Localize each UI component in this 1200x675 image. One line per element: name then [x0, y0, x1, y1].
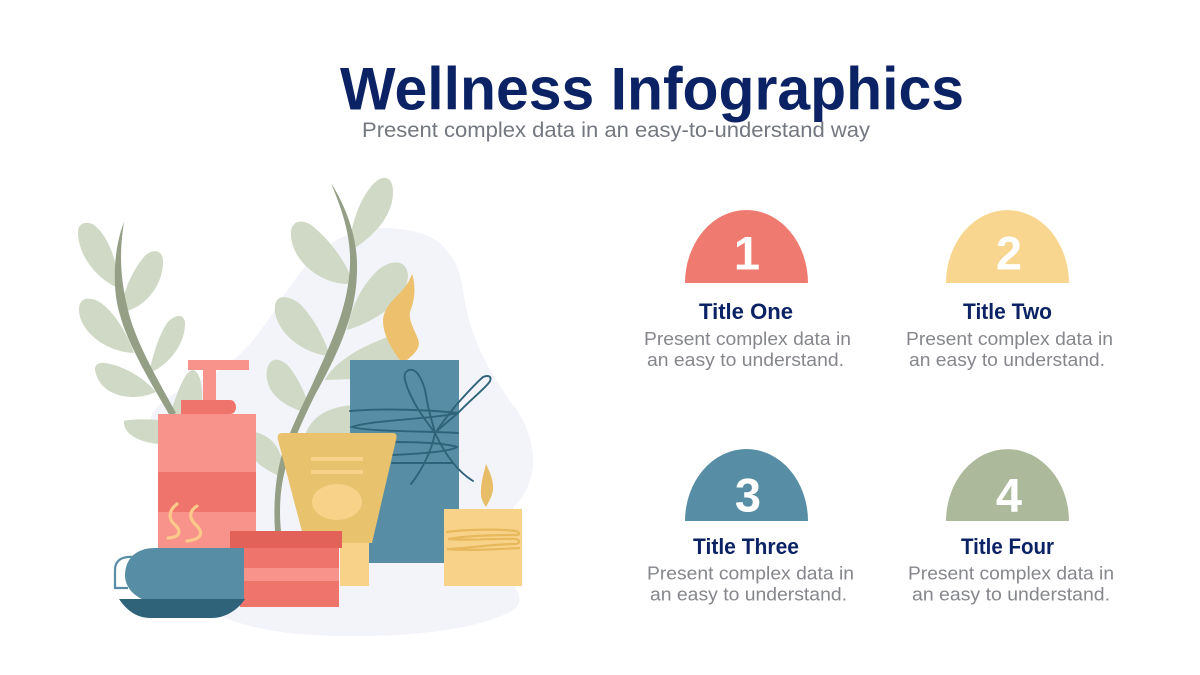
item 4 heading: Title Four	[961, 534, 1054, 559]
jar	[230, 531, 342, 607]
item 1 heading: Title One	[699, 299, 793, 324]
item 3 description: an easy to understand.	[650, 584, 847, 604]
semicircle badge 3	[685, 449, 808, 521]
item 3 description: Present complex data in	[647, 562, 854, 584]
item 3	[647, 449, 854, 604]
item 4 description: an easy to understand.	[912, 584, 1110, 604]
subtitle: Present complex data in an easy-to-understand way	[362, 118, 870, 142]
item 3 heading: Title Three	[693, 534, 799, 559]
pump bottle	[158, 360, 256, 549]
item 1 description: an easy to understand.	[647, 349, 844, 370]
semicircle badge 2	[946, 210, 1069, 283]
tube with cap	[278, 433, 397, 586]
item 2 heading: Title Two	[963, 299, 1052, 324]
teacup and saucer	[115, 548, 245, 618]
semicircle badge 1	[685, 210, 808, 283]
semicircle badge 4	[946, 449, 1069, 521]
item 4 description: Present complex data in	[908, 562, 1114, 584]
title: Wellness Infographics	[340, 56, 964, 122]
number 2: 2	[996, 226, 1022, 280]
number 4: 4	[996, 468, 1022, 522]
item 2 description: Present complex data in	[906, 328, 1113, 349]
large blue candle	[350, 274, 491, 563]
background blob	[150, 228, 533, 636]
item 1 description: Present complex data in	[644, 328, 851, 349]
illustration: wellness products and plants	[78, 178, 533, 636]
small yellow candle	[444, 464, 522, 586]
number 3: 3	[735, 468, 761, 522]
item 1	[644, 210, 851, 370]
item 4	[908, 449, 1114, 604]
item 2	[906, 210, 1113, 370]
left plant	[78, 222, 202, 444]
number 1: 1	[734, 226, 760, 280]
item 2 description: an easy to understand.	[909, 349, 1105, 370]
right plant	[255, 178, 408, 531]
